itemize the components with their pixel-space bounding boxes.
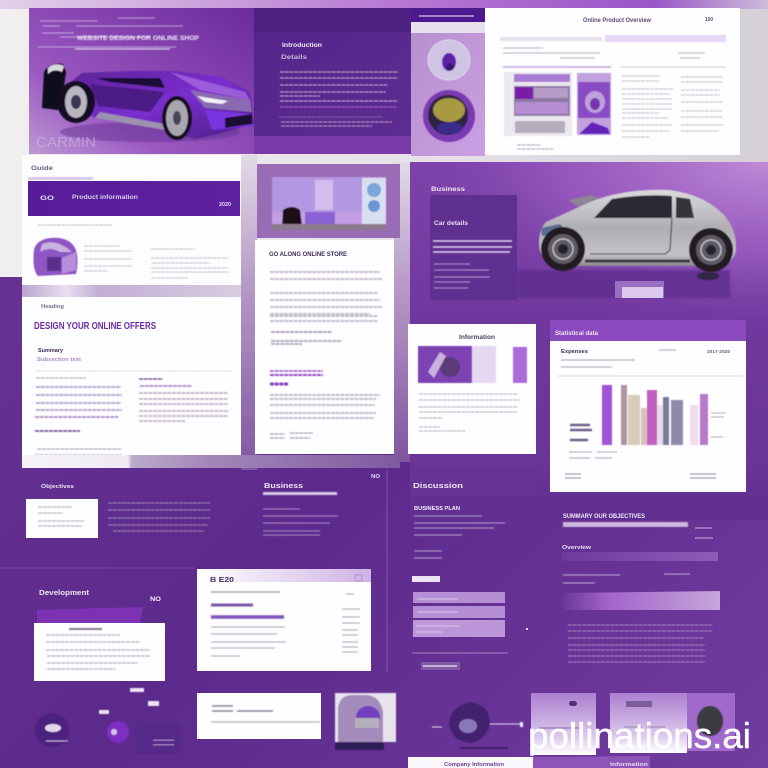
card title: Information	[459, 335, 495, 341]
icon: yellow disc	[423, 90, 475, 142]
panel: white list card	[197, 569, 371, 671]
panel: white small card	[408, 324, 536, 454]
panel: lower card with purple header	[34, 590, 165, 681]
middle body text	[270, 272, 382, 438]
icon: dark badge	[432, 702, 523, 748]
panel: purple car hero	[29, 8, 254, 154]
panel: lower card with purple header: NO	[150, 597, 161, 603]
section label: Business	[431, 186, 465, 193]
panel: lower left text cards: NO	[371, 474, 380, 480]
panel: dark intro text	[254, 8, 411, 154]
card heading: Development	[39, 590, 90, 597]
bottom strip: Information	[610, 762, 648, 768]
panel: white article left	[22, 297, 241, 455]
paragraph	[568, 625, 712, 662]
article columns	[35, 371, 232, 455]
dark description box	[430, 195, 517, 300]
chart caption	[565, 452, 716, 478]
panel: silver car section	[410, 162, 768, 520]
image: showroom	[272, 177, 386, 230]
hero heading: WEBSITE DESIGN FOR ONLINE SHOP	[77, 35, 200, 42]
panel: lower middle list: BUSINESS PLAN	[414, 506, 460, 512]
panel: white article top right	[485, 8, 740, 155]
panel: chart card	[550, 320, 746, 492]
article label: Heading	[41, 304, 64, 310]
icon: dark disc	[35, 713, 69, 747]
panel: chart card: 2017-2020	[707, 349, 731, 354]
article rules	[500, 35, 726, 67]
lavender card two	[610, 693, 735, 753]
panel: white article top right: 100	[705, 17, 713, 23]
bottom strip	[408, 756, 650, 768]
middle heading: GO ALONG ONLINE STORE	[269, 251, 348, 258]
text columns	[517, 76, 724, 149]
card images	[418, 346, 527, 383]
hero heading	[38, 18, 200, 49]
icon: grey puck	[697, 706, 723, 736]
panel: lower right gradient rows: Overview	[562, 545, 591, 551]
icon: purple disc	[107, 721, 129, 743]
panel: foot strip	[22, 455, 400, 468]
watermark: pollinations.ai	[528, 715, 751, 756]
purple band header: Product information	[72, 195, 138, 201]
article headline: DESIGN YOUR ONLINE OFFERS	[34, 321, 156, 332]
panel: dark intro text: Details	[281, 55, 308, 61]
icons: lower left discs	[35, 688, 181, 757]
gradient bar one	[562, 552, 718, 561]
icon: silver car	[539, 190, 736, 280]
purple band header: 2020	[219, 202, 231, 208]
lower heading block: Business	[264, 483, 303, 490]
panel: white footer card	[197, 693, 321, 739]
panel: white article middle	[255, 240, 394, 454]
faint logo text: CARMIN	[36, 134, 96, 151]
panel: lower left text cards	[26, 470, 387, 672]
chart sub heading: Expenses	[561, 349, 588, 355]
right heading: SUMMARY OUR OBJECTIVES	[563, 514, 645, 520]
icon: lavender disc	[428, 40, 470, 80]
panel: white article left: Subsection text	[37, 357, 81, 363]
panel: lower left text cards: Objectives	[41, 484, 74, 490]
screenshot: purple poster	[577, 73, 611, 135]
tag	[412, 576, 440, 582]
article subheading: Summary	[38, 348, 64, 354]
lavender table	[413, 592, 505, 637]
chart card title: Statistical data	[555, 331, 599, 337]
light button	[615, 281, 664, 298]
section label: Guide	[31, 165, 53, 172]
screenshot: dashboard	[504, 72, 572, 136]
purple band header	[28, 181, 240, 216]
panel: bottom right cards	[408, 693, 735, 768]
bar chart	[570, 385, 726, 445]
intro heading: Introduction	[282, 43, 322, 49]
bag text lines	[38, 225, 229, 278]
dark rounded box	[135, 722, 181, 754]
purple band header: GO	[40, 195, 54, 202]
bottom strip: Company Information	[444, 762, 505, 768]
lavender card one	[531, 693, 596, 755]
panel: circular icons column	[411, 8, 485, 156]
article title: Online Product Overview	[583, 18, 651, 24]
icon: purple bag	[34, 238, 78, 276]
floor shadow panel	[517, 270, 730, 298]
panel: showroom image	[257, 164, 400, 238]
icon: purple sports car	[42, 64, 254, 142]
image: purple device	[335, 693, 396, 750]
panel: lower middle list	[410, 470, 536, 670]
gradient bar two	[562, 591, 720, 610]
list heading: Discussion	[413, 483, 463, 490]
dark description box: Car details	[434, 221, 469, 227]
small tags	[99, 688, 159, 714]
list heading: B E20	[210, 577, 234, 584]
card text	[419, 394, 520, 431]
panel: white section with band	[22, 155, 241, 285]
strip under band panel	[22, 285, 241, 298]
panel: lower right gradient rows	[562, 514, 720, 662]
intro body text	[279, 72, 398, 126]
